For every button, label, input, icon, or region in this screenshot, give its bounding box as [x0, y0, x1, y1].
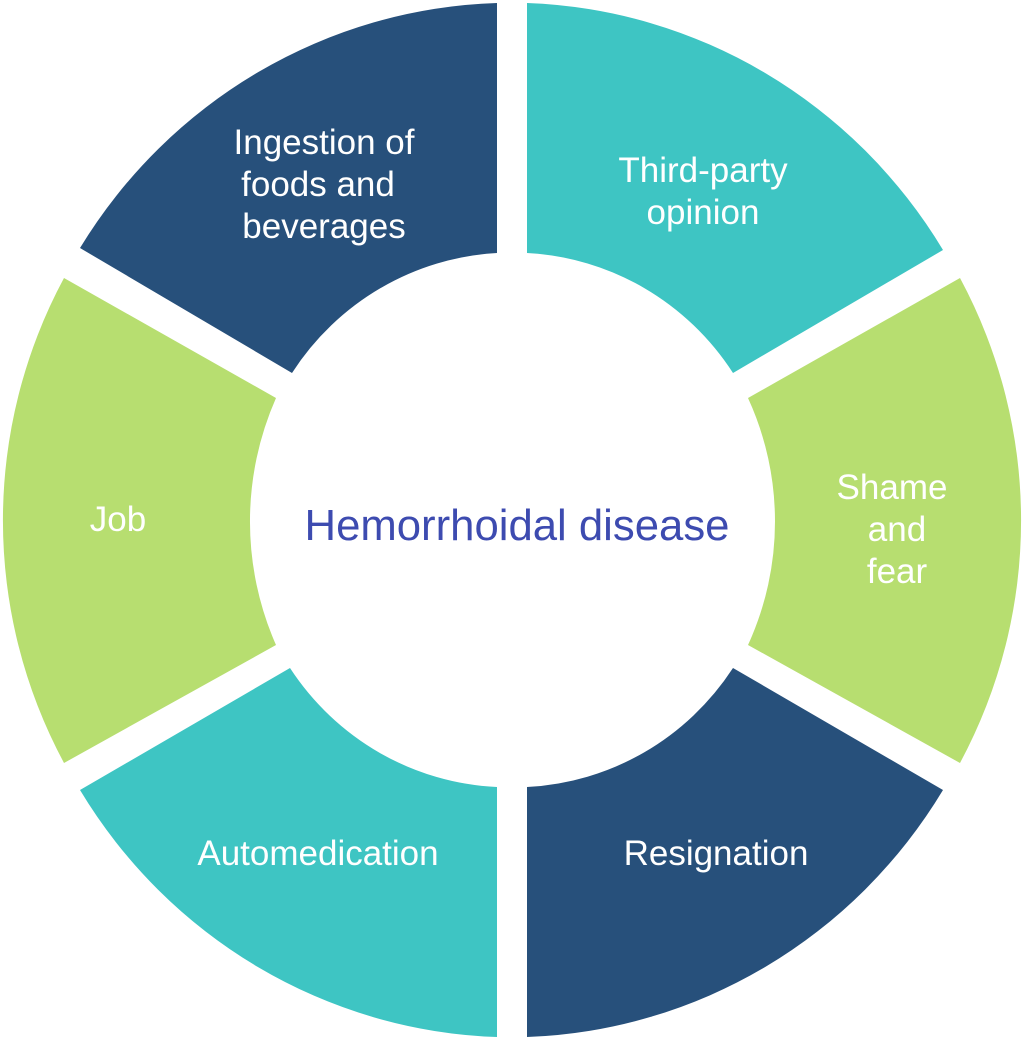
- segment: resignation: [527, 668, 943, 1037]
- segment: ingestion of foods and beverages: foods and: [241, 165, 395, 204]
- segment: automedication: Automedication: [197, 834, 439, 873]
- segment: ingestion of foods and beverages: beverages: [242, 207, 406, 246]
- segment: job: [3, 278, 276, 763]
- segment: third-party opinion: opinion: [647, 193, 759, 232]
- segment: shame and fear: and: [868, 510, 926, 549]
- segment: third-party opinion: [527, 3, 943, 373]
- segment: automedication: [80, 668, 497, 1037]
- segment: shame and fear: fear: [867, 552, 927, 591]
- segment: ingestion of foods and beverages: Ingestion of: [234, 123, 415, 162]
- segment: shame and fear: Shame: [837, 468, 947, 507]
- segment: shame and fear: [748, 278, 1021, 763]
- segment: third-party opinion: Third-party: [618, 151, 788, 190]
- segment: resignation: Resignation: [624, 834, 808, 873]
- center title: Hemorrhoidal disease: [305, 501, 729, 550]
- segment: job: Job: [90, 500, 146, 539]
- segment: ingestion of foods and beverages: [80, 3, 497, 373]
